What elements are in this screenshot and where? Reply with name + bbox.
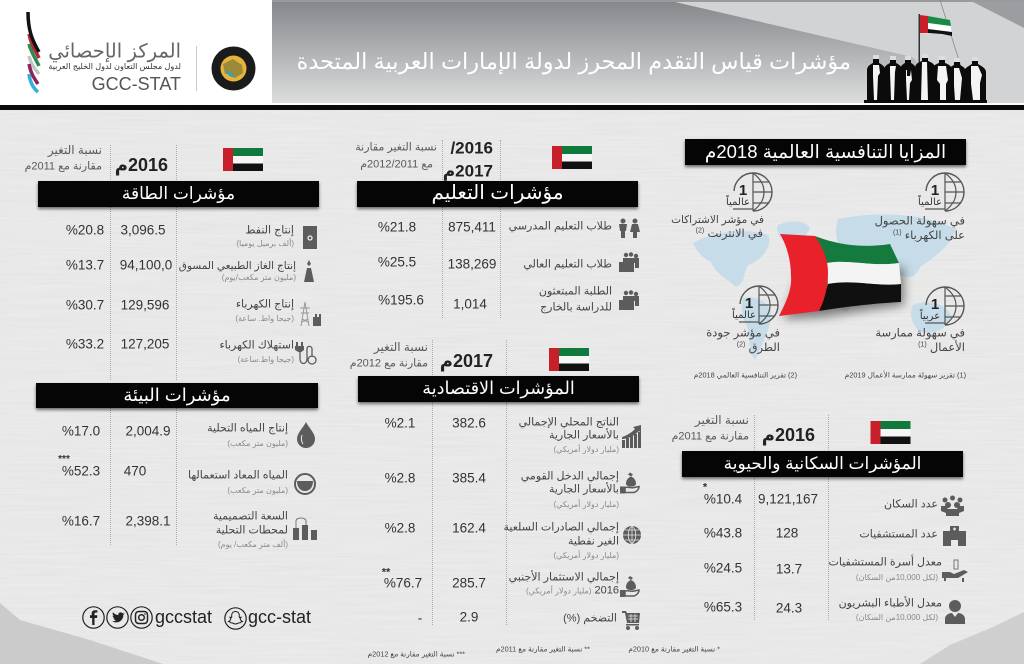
- logo: GCC emblem: [212, 46, 256, 90]
- label: school students: طلاب التعليم المدرسي: [509, 220, 612, 232]
- unit: electricity consumption: (جيجا واط.ساعة): [238, 355, 294, 364]
- year: 2017م: [440, 351, 493, 371]
- note marker: ***: [58, 454, 70, 465]
- footnote: change vs 2010: * نسبة التغير مقارنة مع 2010م: [628, 644, 720, 653]
- change: design capacity: %16.7: [62, 513, 100, 528]
- text: doing business: في سهولة ممارسة: [875, 327, 965, 339]
- change: foreign investment: %76.7: [384, 575, 422, 590]
- black rule under header: [0, 105, 1024, 110]
- icon: recycled water: [294, 470, 316, 497]
- change caption: نسبة التغير: [695, 413, 749, 427]
- logo: Arabic subtitle: لدول مجلس التعاون لدول الخليج العربية: [48, 62, 181, 71]
- logo: Arabic name: المركز الإحصائي: [48, 40, 181, 62]
- icon: national income: [620, 472, 640, 494]
- label: GDP line 2: بالأسعار الجارية: [549, 430, 619, 442]
- icon: higher education: [619, 252, 639, 272]
- label: students abroad: الطلبة المبتعثون: [539, 286, 612, 298]
- icon: students abroad: [619, 290, 639, 310]
- value: GDP: 382.6: [452, 415, 486, 430]
- label: hospitals: عدد المستشفيات: [859, 528, 938, 540]
- section bar: [358, 376, 639, 402]
- unit: GDP: (مليار دولار أمريكي): [553, 445, 619, 454]
- change: bed rate: %24.5: [704, 560, 742, 575]
- text: doing business line 2: الأعمال (1): [918, 341, 965, 354]
- unit: oil production: (ألف برميل يوميا): [236, 239, 294, 248]
- icon: power pylon: [300, 302, 321, 326]
- unit: gas production: (مليون متر مكعب/يوم): [222, 273, 296, 282]
- icon: oil barrel: [303, 226, 317, 249]
- change: electricity consumption: %33.2: [66, 336, 104, 351]
- label: electricity production: إنتاج الكهرباء: [236, 298, 294, 310]
- handle: gcc-stat: gcc-stat: [248, 607, 311, 627]
- value: non-oil exports: 162.4: [452, 520, 486, 535]
- change: oil production: %20.8: [66, 222, 104, 237]
- change caption: نسبة التغير: [374, 340, 428, 354]
- unit: reused water: (مليون متر مكعب): [227, 486, 288, 495]
- label: foreign investment line 2: 2016 (مليار دولار أمريكي): [526, 584, 619, 596]
- globe badge: business ranking: عربياً: [920, 308, 940, 322]
- icon: snapchat: [224, 607, 247, 630]
- label: foreign investment: إجمالي الاستثمار الأجنبي: [509, 572, 619, 584]
- label: non-oil exports line 2: الغير نفطية: [568, 536, 619, 548]
- globe badge: internet subscriptions ranking: 1: [739, 182, 747, 199]
- label: higher education: طلاب التعليم العالي: [523, 258, 612, 270]
- footnote 2: (2) تقرير التنافسية العالمي 2018م: [694, 370, 797, 379]
- value: school students: 875,411: [448, 219, 496, 234]
- change: gas production: %13.7: [66, 257, 104, 272]
- value: hospitals: 128: [776, 525, 798, 540]
- icon: population: [941, 496, 964, 516]
- panel: education indicators: [354, 138, 640, 318]
- icon: hospital: [943, 526, 966, 546]
- change: national income: %2.8: [385, 470, 415, 485]
- globe badge: electricity ranking: 1: [931, 182, 939, 199]
- social media row: [80, 603, 315, 632]
- text: internet subscriptions: في مؤشر الاشتراكات: [671, 214, 764, 226]
- change: electricity production: %30.7: [66, 297, 104, 312]
- value: electricity production: 129,596: [121, 297, 169, 312]
- text: electricity access: في سهولة الحصول: [875, 215, 965, 227]
- change caption line 2: مقارنة مع 2012م: [350, 358, 428, 370]
- icon: foreign investment: [620, 576, 640, 597]
- section bar: [357, 181, 638, 207]
- icon: desalination plant: [293, 517, 317, 540]
- icon: gas well: [304, 260, 314, 282]
- value: inflation: 2.9: [460, 609, 478, 624]
- icon: school students: [619, 218, 640, 238]
- header band: [0, 0, 1024, 110]
- unit: doctor rate: (لكل 10,000من السكان): [856, 613, 938, 622]
- unit: design capacity: (ألف متر مكعب/ يوم): [218, 540, 288, 549]
- panel: economic indicators: [350, 340, 642, 630]
- unit: national income: (مليار دولار أمريكي): [553, 500, 619, 509]
- logo divider: [196, 46, 197, 91]
- change caption: نسبة التغير: [48, 143, 102, 157]
- label: gas production: إنتاج الغاز الطبيعي المسوق: [179, 260, 296, 272]
- year: 2016/: [450, 138, 493, 158]
- flag icon: [223, 148, 263, 171]
- text: road quality line 2: الطرق (2): [737, 341, 780, 354]
- panel: global competitive advantages 2018: [671, 138, 968, 380]
- section bar: [36, 383, 318, 408]
- label: students abroad line 2: للدراسة بالخارج: [540, 302, 612, 314]
- label: national income: إجمالي الدخل القومي: [521, 470, 619, 482]
- year: 2016م: [115, 155, 168, 175]
- label: non-oil exports: إجمالي الصادرات السلعية: [503, 522, 619, 534]
- illustration: men with flag: [864, 14, 987, 103]
- label: GDP: الناتج المحلي الإجمالي: [519, 416, 619, 428]
- label: electricity consumption: استهلاك الكهرباء: [219, 340, 294, 352]
- handle: gccstat: gccstat: [155, 607, 212, 627]
- change caption line 2: مع 2012/2011م: [360, 158, 433, 170]
- change: desalinated water: %17.0: [62, 423, 100, 438]
- icon: twitter: [106, 606, 129, 629]
- globe badge: electricity ranking: [918, 172, 965, 212]
- icon: water drop: [297, 422, 315, 448]
- text: internet subscriptions line 2: في الانترنت (2): [696, 227, 763, 240]
- panel title bar: [685, 139, 966, 165]
- footnote: change vs 2011: ** نسبة التغير مقارنة مع 2011م: [496, 644, 590, 653]
- value: higher education: 138,269: [448, 256, 496, 271]
- year line 2: 2017م: [443, 162, 493, 180]
- label: inflation: التضخم (%): [563, 612, 617, 624]
- panel: population and vital indicators: [672, 413, 968, 624]
- section bar: مؤشرات التعليم: [431, 182, 564, 204]
- value: desalinated water: 2,004.9: [125, 423, 171, 438]
- section bar: مؤشرات البيئة: [123, 385, 231, 405]
- globe badge: electricity ranking: عالمياً: [918, 194, 942, 208]
- logo: ribbons: [26, 12, 40, 94]
- section bar: [38, 181, 319, 207]
- change caption: نسبة التغير مقارنة: [355, 142, 437, 154]
- change: students abroad: %195.6: [378, 292, 424, 307]
- flag icon: [549, 348, 589, 371]
- unit: non-oil exports: (مليار دولار أمريكي): [553, 551, 619, 560]
- label: reused water: المياه المعاد استعمالها: [188, 470, 288, 482]
- icon: shopping cart: [622, 611, 640, 630]
- text: road quality: في مؤشر جودة: [706, 327, 780, 339]
- value: oil production: 3,096.5: [120, 222, 166, 237]
- text: electricity access line 2: على الكهرباء (1): [893, 229, 965, 242]
- value: students abroad: 1,014: [453, 296, 487, 311]
- globe badge: roads ranking: [732, 285, 779, 325]
- unit: bed rate: (لكل 10,000من السكان): [856, 573, 938, 582]
- world map: [693, 214, 956, 360]
- label: design capacity line 2: لمحطات التحلية: [216, 524, 288, 536]
- note marker: **: [382, 566, 390, 578]
- value: design capacity: 2,398.1: [125, 513, 171, 528]
- unit: desalinated water: (مليون متر مكعب): [227, 439, 288, 448]
- value: foreign investment: 285.7: [452, 575, 486, 590]
- globe badge: roads ranking: 1: [745, 295, 753, 312]
- globe badge: business ranking: 1: [931, 296, 939, 313]
- icon: GDP growth chart: [622, 425, 641, 448]
- label: national income line 2: بالأسعار الجارية: [549, 484, 619, 496]
- label: desalinated water: إنتاج المياه التحلية: [207, 422, 288, 434]
- globe badge: business ranking: [920, 286, 965, 326]
- change: non-oil exports: %2.8: [385, 520, 415, 535]
- UAE flag: [779, 234, 911, 326]
- flag icon: [552, 146, 592, 169]
- header title: مؤشرات قياس التقدم المحرز لدولة الإمارات العربية المتحدة: [297, 49, 851, 74]
- change caption line 2: مقارنة مع 2011م: [672, 430, 749, 442]
- panel: environment indicators: [30, 380, 325, 550]
- label: doctor rate: معدل الأطباء البشريون: [839, 598, 942, 610]
- label: population: عدد السكان: [884, 498, 938, 510]
- change: population: %10.4: [704, 491, 742, 506]
- flag icon: [870, 421, 910, 444]
- change: reused water: %52.3: [62, 463, 100, 478]
- value: gas production: 94,100,0: [120, 257, 172, 272]
- icon: doctor: [945, 600, 965, 624]
- section bar: [682, 451, 963, 477]
- icon: hospital bed: [942, 560, 968, 582]
- section bar: مؤشرات الطاقة: [122, 184, 235, 203]
- icon: globe exports: [623, 526, 641, 544]
- value: national income: 385.4: [452, 470, 486, 485]
- globe badge: roads ranking: عالمياً: [732, 307, 756, 321]
- value: electricity consumption: 127,205: [121, 336, 169, 351]
- icon: power plug: [295, 342, 317, 365]
- change: hospitals: %43.8: [704, 525, 742, 540]
- change: doctor rate: %65.3: [704, 599, 742, 614]
- icon: facebook: [82, 606, 105, 629]
- panel: energy indicators: [25, 143, 322, 380]
- value: population: 9,121,167: [758, 491, 818, 506]
- value: reused water: 470: [124, 463, 146, 478]
- panel title bar: المزايا التنافسية العالمية 2018م: [705, 141, 946, 162]
- label: bed rate: معدل أسرة المستشفيات: [828, 556, 942, 568]
- globe badge: internet subscriptions ranking: عالمياً: [726, 194, 750, 208]
- footnote 1: (1) تقرير سهولة ممارسة الأعمال 2019م: [845, 370, 966, 379]
- logo: GCC-STAT wordmark: GCC-STAT: [92, 74, 181, 94]
- header gradient panel: [272, 0, 1024, 103]
- change: GDP: %2.1: [385, 415, 415, 430]
- label: design capacity: السعة التصميمية: [213, 510, 288, 522]
- section bar: المؤشرات الاقتصادية: [422, 378, 575, 398]
- change: school students: %21.8: [378, 219, 416, 234]
- year: 2016م: [762, 425, 815, 445]
- change: higher education: %25.5: [378, 254, 416, 269]
- footnote: change vs 2012: *** نسبة التغير مقارنة مع 2012م: [368, 649, 465, 658]
- globe badge: internet subscriptions ranking: [726, 172, 773, 212]
- value: bed rate: 13.7: [776, 561, 802, 576]
- unit: electricity production: (جيجا واط. ساعة): [235, 314, 294, 323]
- change caption line 2: مقارنة مع 2011م: [25, 160, 102, 172]
- value: doctor rate: 24.3: [776, 600, 802, 615]
- icon: instagram: [130, 606, 153, 629]
- label: oil production: إنتاج النفط: [245, 224, 294, 236]
- change: inflation: -: [418, 610, 422, 625]
- section bar: المؤشرات السكانية والحيوية: [724, 454, 921, 473]
- note marker: *: [703, 482, 707, 494]
